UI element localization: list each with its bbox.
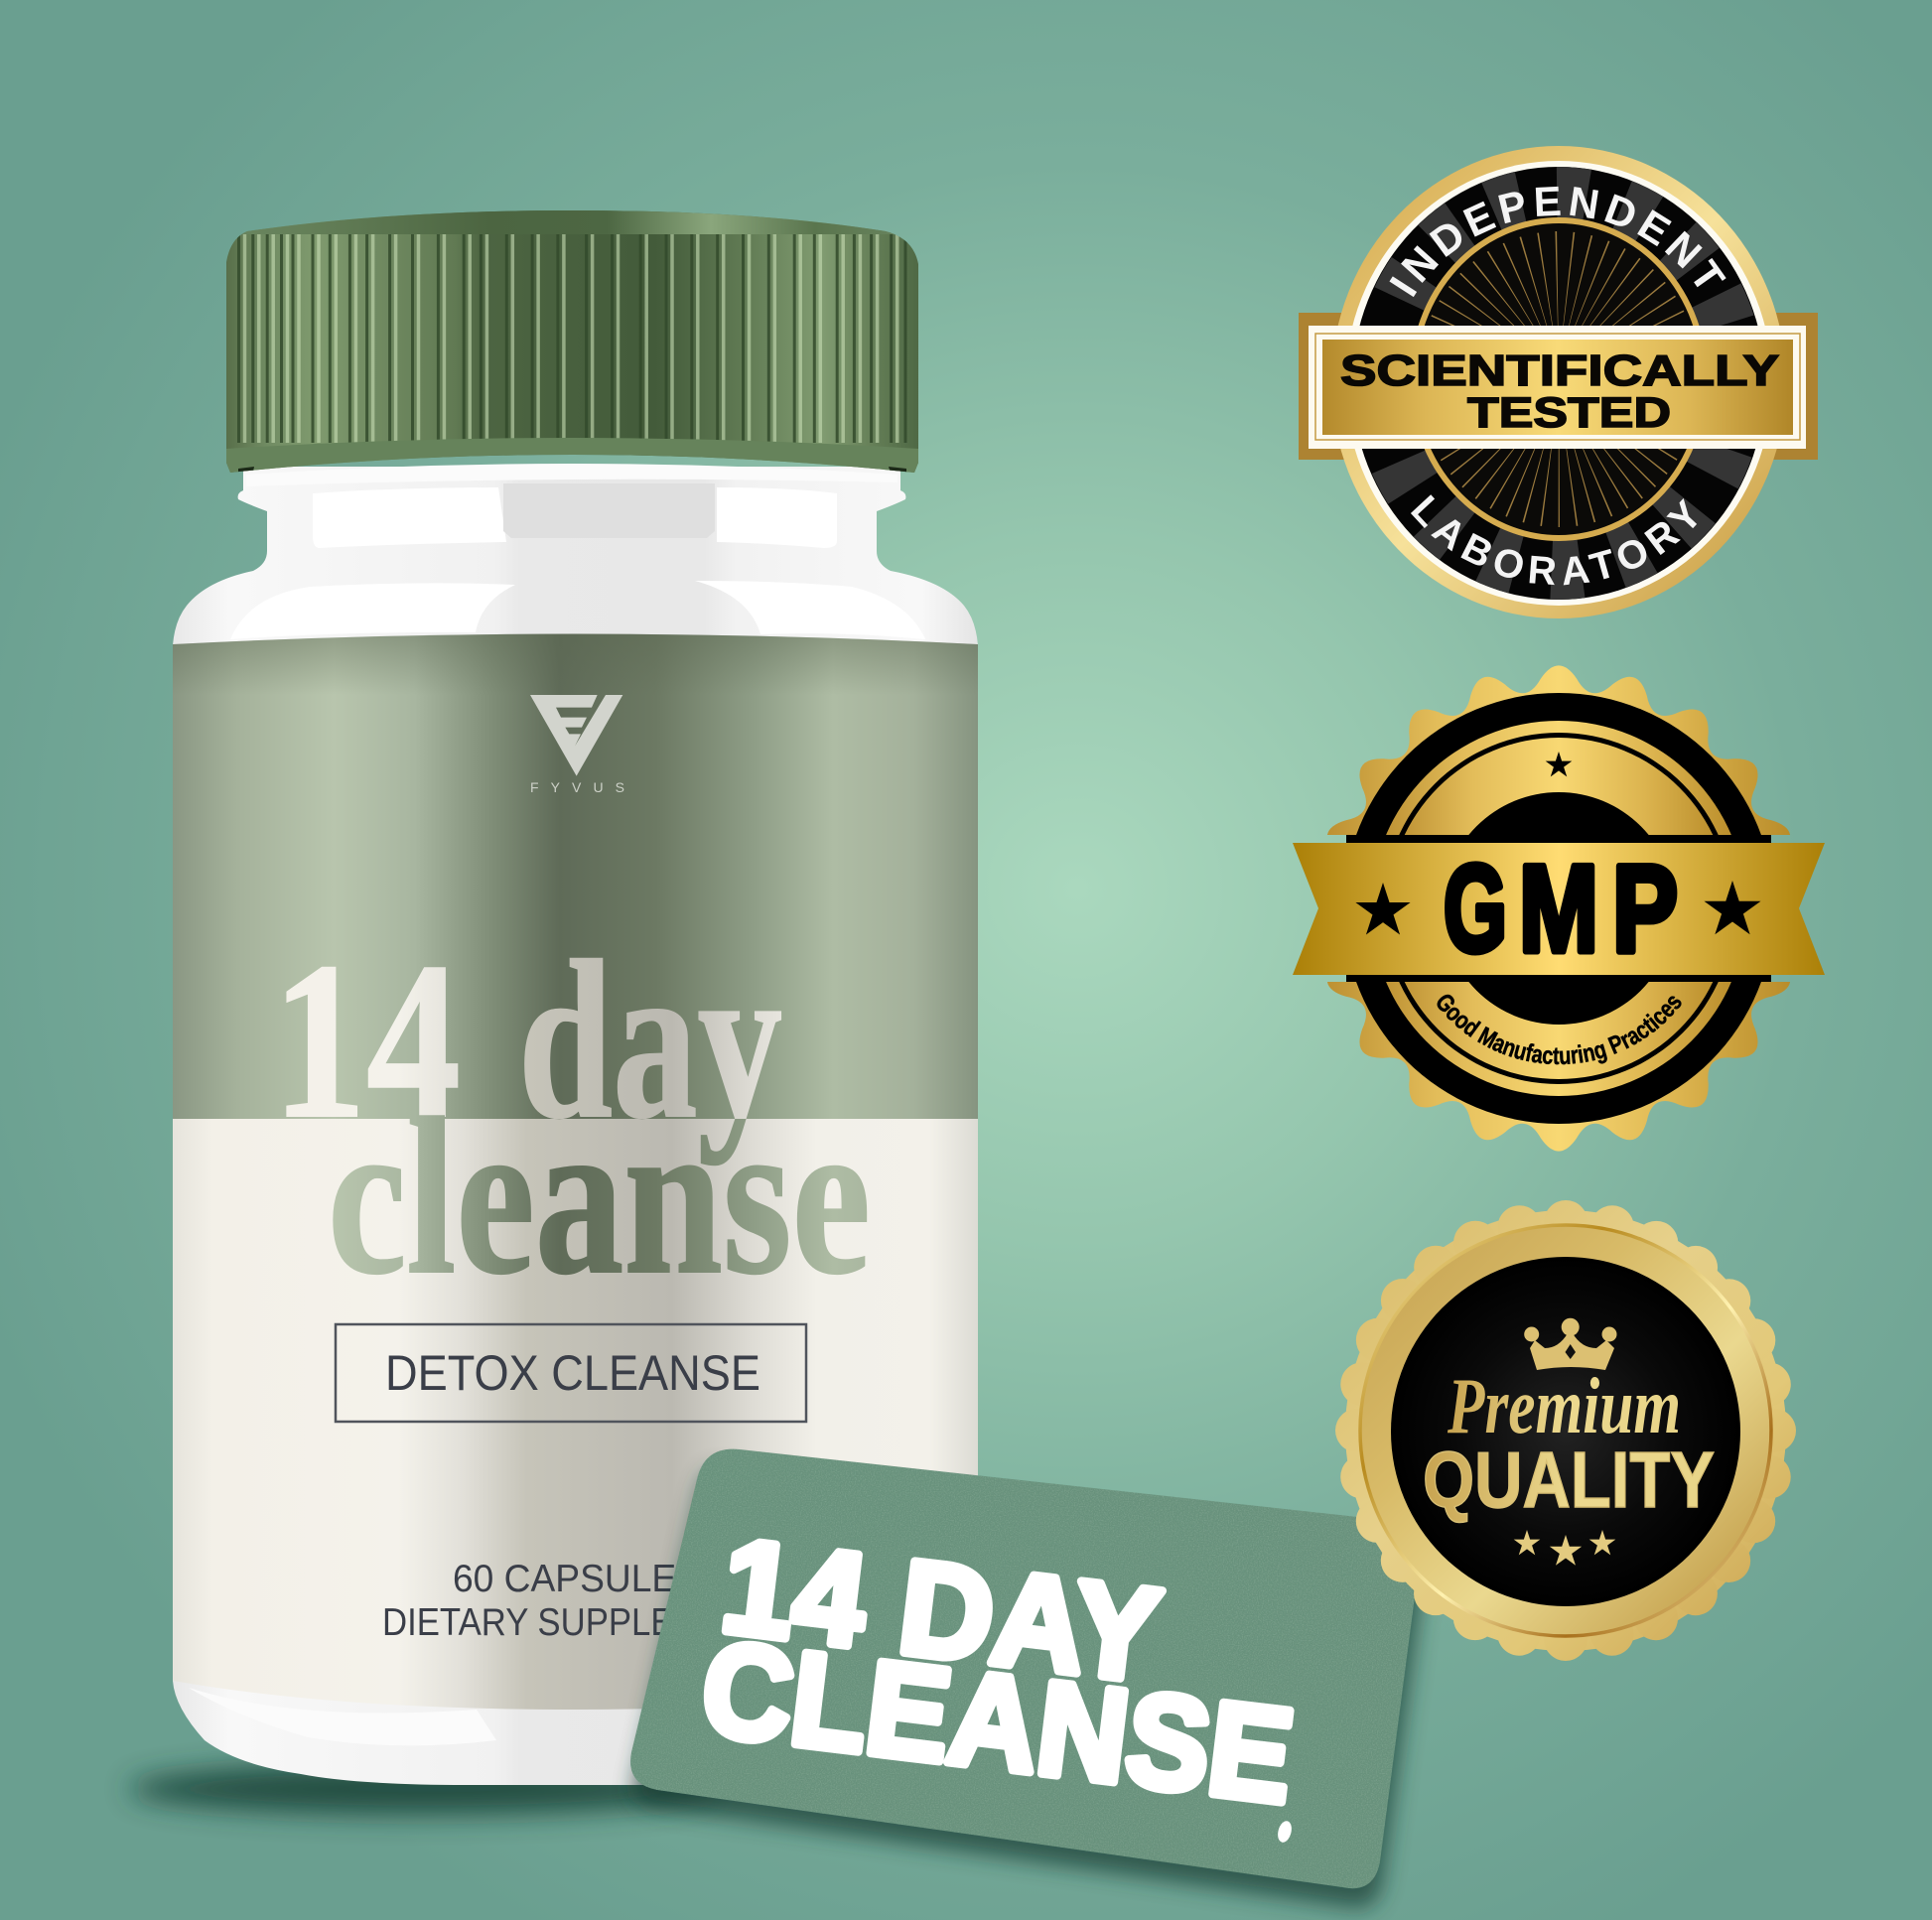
right star: [1704, 881, 1761, 934]
arc text: good manufacturing practices: Good Manufacturing Practices: [1438, 995, 1682, 1064]
product card: [630, 1449, 1420, 1888]
banner text 2: TESTED: [1467, 389, 1671, 437]
bottom highlight: [189, 1688, 496, 1745]
title: day descender: day: [518, 915, 782, 1166]
sunburst rays: [1471, 285, 1646, 474]
neck highlights: [246, 464, 897, 548]
gold ring: [1371, 721, 1746, 1096]
logo mark: [530, 695, 622, 776]
badge: gmp: [1293, 665, 1825, 1152]
ring stripes: [1383, 197, 1734, 570]
shoulder highlights: [230, 581, 925, 639]
logo wordmark: FYVUS: [530, 779, 624, 795]
product title: [286, 957, 868, 1275]
supplement line: DIETARY SUPPLEMENT: [382, 1601, 771, 1644]
cap bottom rim: [226, 438, 918, 473]
card title: 14 DAY: 14 DAY: [715, 1512, 1168, 1711]
card dot: [1276, 1820, 1294, 1844]
box outline: [336, 1324, 806, 1422]
three stars: [1514, 1530, 1615, 1566]
arc text: independent: INDEPENDENT: [1390, 187, 1726, 298]
title: 14: 14: [272, 916, 461, 1165]
card shadow: [633, 1469, 1427, 1908]
black outer ring: [1343, 693, 1774, 1124]
brand logo: [530, 695, 624, 795]
cap base: [226, 210, 918, 473]
banner text 1: SCIENTIFICALLY: [1340, 346, 1779, 395]
label top shading: [173, 633, 978, 695]
letter P: P: [1612, 841, 1678, 978]
detox cleanse box: [336, 1324, 806, 1422]
banner back: [1299, 313, 1818, 460]
arc guide paths: [1365, 215, 1752, 1064]
scalloped gold edge: [1345, 1210, 1786, 1651]
inner sunburst disc: [1413, 220, 1705, 538]
letter M: M: [1519, 841, 1598, 978]
box text: DETOX CLEANSE: [385, 1345, 760, 1401]
left star: [1355, 883, 1411, 934]
ribbon banner: [1293, 843, 1825, 975]
premium script text: Premium: [1447, 1363, 1681, 1450]
label: green band: [173, 633, 978, 1119]
black strip behind banner: [1346, 835, 1771, 982]
badge: premium quality: [1345, 1210, 1786, 1651]
cap top rim: [226, 210, 918, 234]
crown: [1524, 1318, 1616, 1370]
gold disc: [1388, 738, 1729, 1079]
arc text: laboratory: LABORATORY: [1411, 494, 1697, 586]
gmp text: [1444, 841, 1678, 978]
black ring: [1352, 167, 1765, 600]
white ring: [1345, 161, 1772, 606]
thin black ring: [1383, 733, 1734, 1084]
card title: CLEANSE: CLEANSE: [695, 1614, 1301, 1831]
bottle body: [173, 467, 978, 1785]
banner gold plate: [1322, 340, 1793, 435]
ribbed cap: [226, 210, 918, 477]
capsule count: 60 CAPSULES: [453, 1558, 701, 1600]
cap ridges light: [244, 234, 897, 443]
label: cream band: [173, 1119, 978, 1710]
title: cleanse: cleanse: [328, 1072, 871, 1320]
banner thin line: [1315, 334, 1800, 440]
top star: [1546, 752, 1572, 776]
quality text: QUALITY: [1423, 1436, 1715, 1524]
card body: [630, 1449, 1420, 1888]
inner black disc: [1443, 792, 1675, 1025]
bottle shadow: [129, 1763, 725, 1815]
supplement bottle: [173, 210, 978, 1785]
badge: scientifically tested: [1299, 146, 1818, 618]
bright ring: [1360, 1225, 1771, 1636]
banner white frame: [1309, 326, 1806, 449]
letter G: G: [1444, 841, 1507, 978]
cap ridges dark: [238, 234, 905, 443]
outer gold ring: [1331, 146, 1786, 618]
cap lip notches: [238, 467, 906, 473]
black disc: [1391, 1257, 1740, 1606]
title: day: day: [518, 915, 782, 1166]
gold starburst: [1315, 665, 1802, 1152]
